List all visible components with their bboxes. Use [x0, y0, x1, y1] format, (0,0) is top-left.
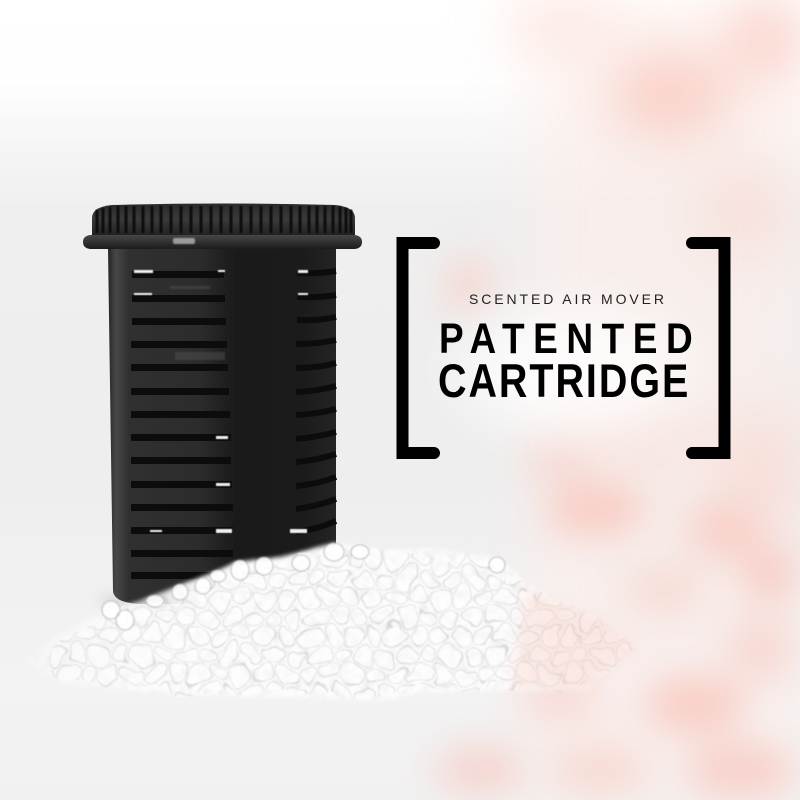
right slots: [296, 271, 336, 532]
left slots: [131, 271, 233, 579]
subtitle: SCENTED AIR MOVER: [469, 291, 664, 307]
flange highlight: [173, 238, 195, 244]
title line 2: CARTRIDGE: [438, 356, 688, 408]
cap flange: [83, 235, 362, 249]
cap ribs: [97, 207, 351, 232]
white haze behind text: [482, 315, 678, 440]
cartridge shadow: [97, 591, 347, 609]
pellet pile: [24, 543, 644, 700]
inner pellets: [40, 552, 635, 696]
title line 1: PATENTED: [439, 315, 693, 363]
body reflections: [170, 286, 225, 360]
pink tint on pile: [510, 590, 640, 688]
top edge pellets: [102, 543, 505, 630]
left bracket: [402, 243, 434, 453]
cartridge body: [108, 248, 336, 604]
cartridge: [83, 204, 362, 609]
cap top: [92, 204, 355, 235]
pile mass: [24, 543, 644, 700]
right bracket: [692, 243, 724, 453]
slot highlights: [134, 270, 312, 556]
blurred pink petals: [435, 0, 800, 800]
